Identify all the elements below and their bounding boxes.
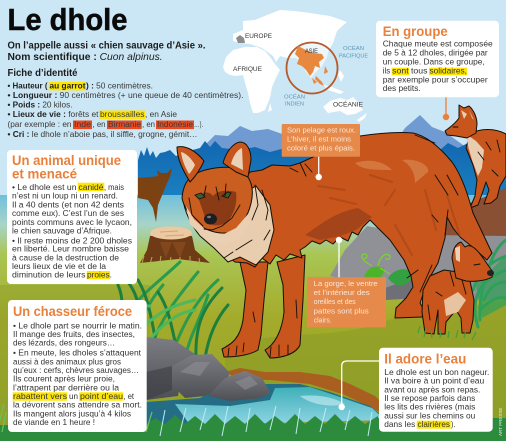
- heading: Il adore l’eau: [384, 351, 466, 366]
- body text: solidaires,: [430, 65, 467, 75]
- subtitle: On l’appelle aussi « chien sauvage d’Asie ».: [8, 40, 206, 52]
- panel: un animal unique: [7, 150, 137, 284]
- body text: de viande en 1 heure !: [13, 417, 95, 427]
- body text: Ils courent après leur proie,: [13, 374, 115, 384]
- subtitle: [8, 40, 206, 63]
- fact list: Inde: [74, 120, 92, 129]
- highlight: [417, 421, 451, 429]
- connector: en groupe: [443, 97, 449, 120]
- body text: ).: [451, 419, 456, 429]
- callout: gorge: pattes sont plus: [314, 306, 369, 315]
- callout: pelage: L’hiver, il est moins: [287, 135, 351, 144]
- tall grass clump: [112, 262, 228, 360]
- body text: ils: [383, 65, 390, 75]
- map labels: PACIFIQUE: [339, 54, 368, 60]
- callout: gorge: clairs.: [314, 315, 332, 324]
- brown rock: [430, 188, 506, 240]
- ground: [0, 195, 506, 441]
- deer silhouette: [138, 168, 172, 222]
- fact list: • Lieux de vie : forêts et: [8, 110, 99, 119]
- connector: pelage: [316, 156, 322, 180]
- map labels: OCÉANIE: [333, 102, 363, 108]
- panel: un chasseur feroce: [8, 300, 147, 432]
- body text: comme eux). C’est l’un de ses: [12, 208, 124, 218]
- callout: gorge: et l’intérieur des: [314, 288, 370, 297]
- icon: france marker: [236, 35, 245, 43]
- fact list: broussailles: [100, 110, 144, 119]
- heading: [12, 153, 121, 182]
- body: [206, 133, 492, 318]
- subtitle: Nom scientifique : Cuon alpinus.: [8, 52, 163, 63]
- fact list: , en: [92, 120, 106, 129]
- body text: point d’eau: [80, 391, 123, 401]
- fact sheet: [8, 68, 244, 139]
- body text: proies.: [87, 270, 112, 280]
- body text: • Il reste moins de 2 200 dholes: [12, 235, 132, 245]
- fact list: • Poids : 20 kilos.: [8, 100, 72, 110]
- heading: Un animal unique: [12, 153, 121, 168]
- body text: Il mange des fruits, des insectes,: [13, 329, 135, 339]
- fact list: [8, 82, 244, 139]
- map labels: [233, 34, 368, 108]
- body text: des petits.: [383, 83, 421, 93]
- heading: Un chasseur féroce: [13, 304, 132, 319]
- world map: [223, 10, 368, 122]
- body text: Il a 40 dents (et non 42 dents: [12, 199, 124, 209]
- body text: • Le dhole part se nourrir le matin.: [13, 320, 142, 330]
- body text: clairières: [418, 419, 450, 429]
- callout: pelage: [282, 124, 360, 157]
- body text: leurs lieux de vie et de la: [12, 261, 106, 271]
- callout: gorge: [307, 277, 386, 327]
- right dhole, top: [445, 105, 506, 208]
- mountains: [200, 115, 470, 200]
- body text: • Le dhole est un: [12, 182, 77, 192]
- fact list: Indonésie: [157, 120, 194, 129]
- map labels: INDIEN: [285, 102, 304, 108]
- body text: n’est ni un loup ni un renard.: [12, 191, 118, 201]
- heading: et menacé: [12, 166, 77, 182]
- body text: rabattent vers: [13, 391, 67, 401]
- eyes and nose: [195, 192, 231, 224]
- body text: , et: [124, 391, 135, 401]
- body text: sont: [392, 65, 409, 75]
- body text: dans les: [384, 419, 415, 429]
- callout: gorge: oreilles et des: [314, 297, 356, 306]
- body text: en liberté. Leur nombre baisse: [12, 244, 129, 254]
- body text: un couple. Dans ce groupe,: [383, 56, 485, 66]
- body text: Il va boire à un point d’eau: [384, 376, 485, 386]
- body text: le chien sauvage d’Afrique.: [12, 225, 112, 235]
- map labels: AFRIQUE: [233, 67, 262, 73]
- fact list: • Hauteur (: [8, 82, 48, 90]
- body text: [12, 182, 132, 280]
- body text: la dévorent sans attendre sa mort.: [13, 400, 142, 410]
- body text: les lits des rivières (mais: [384, 402, 475, 412]
- body text: Il se repose parfois dans: [384, 393, 475, 403]
- fact list: , en Asie: [145, 110, 178, 119]
- body text: points communs avec le lycaon,: [12, 217, 132, 227]
- body text: [383, 39, 493, 93]
- body text: canidé: [78, 182, 104, 192]
- body text: Ils mangent alors jusqu’à 4 kilos: [13, 408, 131, 418]
- credit: ART PRESSE: [498, 408, 503, 436]
- fact sheet heading: Fiche d’identité: [8, 68, 78, 79]
- head and chest: [177, 142, 274, 265]
- dark belly shading: [305, 208, 372, 240]
- title: Le dhole: [8, 2, 128, 37]
- fact list: …).: [194, 120, 203, 129]
- body text: de 5 à 12 dholes, dirigée par: [383, 48, 488, 58]
- body text: [13, 320, 142, 427]
- body text: Chaque meute est composée: [383, 39, 493, 49]
- fern on the right: [473, 240, 506, 327]
- body text: à cause de la destruction de: [12, 252, 119, 262]
- body text: [384, 367, 489, 429]
- main dhole: [177, 133, 492, 358]
- body text: avant ou après son repas.: [384, 384, 480, 394]
- forest band: [138, 140, 506, 225]
- body text: l’attrapent par derrière ou la: [13, 382, 119, 392]
- fact list: ) : 50 centimètres.: [86, 82, 153, 90]
- highlights: [392, 68, 467, 75]
- fact list: au garrot: [50, 82, 86, 90]
- body text: , mais: [104, 182, 124, 192]
- icon: asia range circle: [286, 42, 338, 94]
- body text: diminution de leurs: [12, 270, 86, 280]
- foreground grass: [0, 404, 506, 441]
- map labels: OCÉAN: [284, 94, 305, 100]
- body text: aussi sur les chemins ou: [384, 410, 475, 420]
- panel: en groupe: [376, 21, 499, 97]
- body text: un: [69, 391, 78, 401]
- callout: gorge: La gorge, le ventre: [314, 279, 378, 288]
- heading: En groupe: [383, 24, 448, 39]
- tree stump: [140, 226, 210, 265]
- highlights: [13, 392, 123, 401]
- grey rock: [330, 226, 506, 300]
- map labels: EUROPE: [245, 34, 272, 40]
- connector: eau: [338, 361, 380, 410]
- body text: • En meute, les dholes s’attaquent: [13, 348, 142, 358]
- fact list: Birmanie: [108, 120, 142, 129]
- body text: aussi à des animaux plus gros: [13, 356, 121, 366]
- callout: pelage: coloré et plus épais.: [287, 144, 355, 153]
- highlights: [49, 82, 194, 129]
- map labels: OCÉAN: [343, 45, 364, 52]
- fact list: , en: [142, 120, 155, 129]
- rocks: [146, 337, 270, 401]
- map labels: ASIE: [305, 49, 318, 55]
- pup: [418, 242, 494, 340]
- body text: qu’eux : cerfs, chèvres sauvages…: [13, 365, 139, 375]
- green plant on the grey rock: [362, 254, 414, 285]
- front legs: [222, 255, 305, 358]
- body text: tous: [411, 65, 428, 75]
- body text: par exemple pour s’occuper: [383, 74, 488, 84]
- panel: il adore l'eau: [379, 348, 493, 432]
- bank and pond: [146, 368, 390, 425]
- fact list: (par exemple : en: [8, 120, 72, 129]
- body text: des lézards, des rongeurs…: [13, 338, 115, 348]
- fact list: • Cri : le dhole n’aboie pas, il siffle, grogne, gémit…: [8, 130, 197, 139]
- fact list: • Longueur : 90 centimètres (+ une queue de 40 centimètres).: [8, 91, 244, 100]
- highlights: [78, 183, 110, 279]
- body text: Le dhole est un bon nageur.: [384, 367, 489, 377]
- connector: gorge: [336, 237, 342, 278]
- callout: pelage: Son pelage est roux.: [287, 126, 356, 135]
